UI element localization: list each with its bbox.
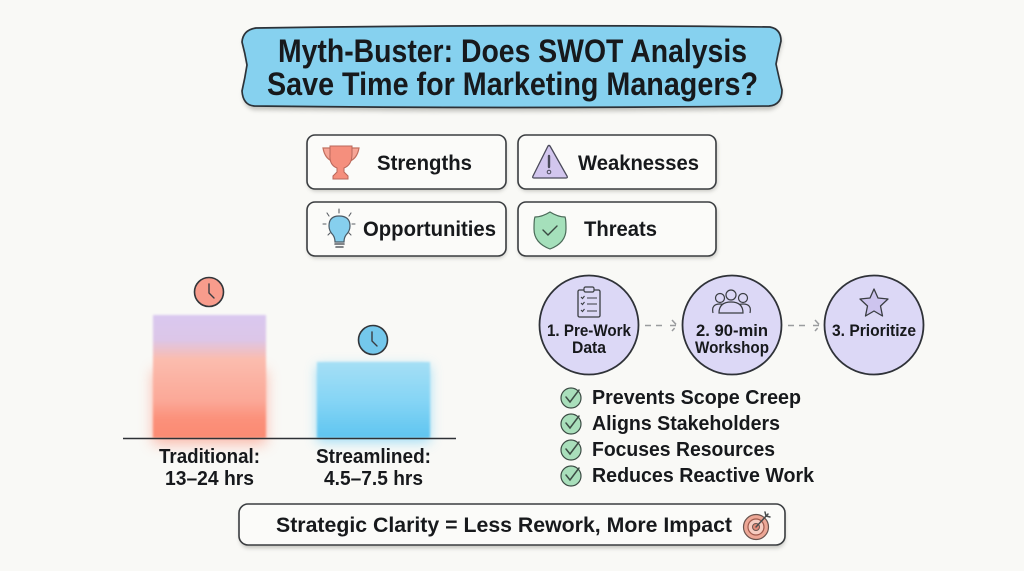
callout: takeaway: [239, 504, 785, 548]
panel: opportunities: [307, 202, 506, 258]
label: traditional: 13–24 hrs: [165, 468, 254, 490]
panel: strengths: Strengths: [377, 152, 472, 175]
step 2: 2. 90-min: [696, 322, 768, 340]
icon: star: [860, 289, 888, 316]
arrow 2: [788, 320, 820, 331]
icon: red clock: [194, 278, 224, 306]
title banner: [242, 26, 782, 111]
step 1: 1. Pre-Work: [547, 322, 632, 340]
label: streamlined: Streamlined:: [316, 446, 431, 468]
step 3: 3. Prioritize: [832, 322, 916, 340]
step 2: [682, 276, 782, 374]
icon: target: [744, 512, 770, 540]
panel: weaknesses: Weaknesses: [578, 152, 699, 175]
icon: trophy: [323, 146, 359, 179]
step 2: Workshop: [695, 339, 769, 357]
icon: warning triangle: [533, 146, 567, 178]
label: traditional: Traditional:: [159, 446, 260, 468]
benefit: prevents scope creep: Prevents Scope Creep: [592, 386, 801, 409]
title text: Myth-Buster: Does SWOT Analysis: [278, 33, 747, 69]
benefits checklist: [561, 386, 815, 487]
icon: light bulb: [323, 209, 355, 247]
benefit: aligns stakeholders: Aligns Stakeholders: [592, 412, 780, 435]
icon: people: [713, 290, 750, 313]
icon: shield: [534, 212, 566, 249]
step 3: [824, 276, 924, 374]
icon: clipboard: [578, 287, 600, 317]
step 1: [540, 276, 638, 374]
label: streamlined: [316, 446, 431, 490]
panel: strengths: [307, 135, 506, 191]
arrow 1: [645, 320, 677, 331]
chart baseline: [123, 438, 456, 440]
step 1: Data: [572, 339, 607, 357]
benefit: reduces reactive work: Reduces Reactive Work: [592, 464, 815, 487]
benefit: focuses resources: Focuses Resources: [592, 438, 775, 461]
title banner: Save Time for Marketing Managers?: [267, 66, 758, 102]
label: traditional: [159, 446, 260, 490]
panel: threats: [518, 202, 717, 258]
label: streamlined: 4.5–7.5 hrs: [324, 468, 423, 490]
panel: threats: Threats: [584, 218, 657, 241]
process flow: [540, 276, 924, 374]
bar: streamlined: [317, 362, 430, 442]
callout: takeaway: Strategic Clarity = Less Rework, More Impact: [276, 514, 732, 537]
icon: blue clock: [358, 326, 388, 354]
bar: traditional: [153, 315, 266, 444]
bar chart: time comparison: [123, 278, 456, 490]
panel: weaknesses: [518, 135, 717, 191]
panel: opportunities: Opportunities: [363, 218, 496, 241]
